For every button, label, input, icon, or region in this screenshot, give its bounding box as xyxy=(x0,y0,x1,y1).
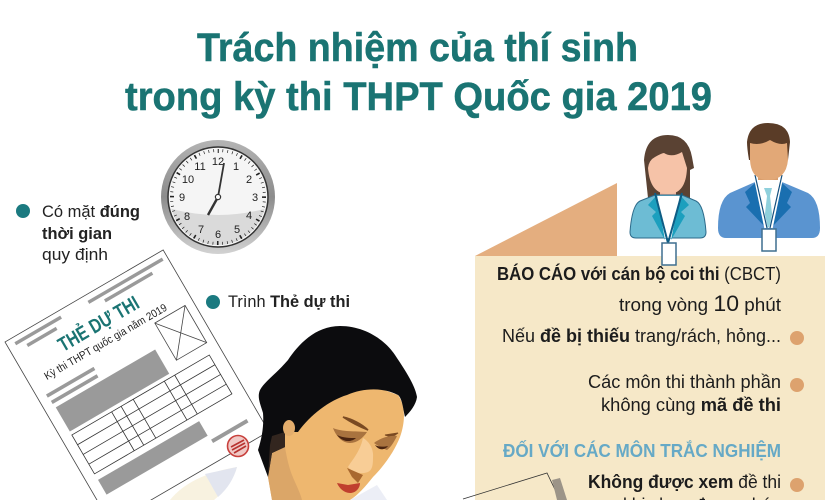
icon: male invigilator xyxy=(718,123,820,251)
item: mismatched exam code xyxy=(588,372,804,415)
icon: wall clock: 1 xyxy=(233,161,239,173)
icon: wall clock: 10 xyxy=(182,174,194,186)
icon: wall clock: 6 xyxy=(215,229,221,241)
item: mismatched exam code: không cùng mã đề thi xyxy=(601,395,781,415)
icon: wall clock: 4 xyxy=(246,210,252,222)
icon: wall clock: 2 xyxy=(246,174,252,186)
icon: wall clock xyxy=(161,140,275,254)
illustration: student head xyxy=(258,326,417,500)
icon: red stamp xyxy=(228,436,248,456)
panel: beige responsibilities xyxy=(475,256,825,500)
icon: wall clock: 7 xyxy=(198,224,204,236)
text: report to invigilator: trong vòng 10 phút xyxy=(619,291,781,316)
icon: wall clock: 11 xyxy=(194,161,206,173)
icon: female invigilator xyxy=(630,135,706,265)
icon: wall clock: 8 xyxy=(184,211,190,223)
icon: wall clock: 5 xyxy=(234,224,240,236)
bullet: present admission card: Trình Thẻ dự thi xyxy=(228,292,350,311)
photo placeholder xyxy=(155,305,207,360)
student shirt sleeve xyxy=(170,467,237,500)
title xyxy=(125,26,712,119)
admission card document xyxy=(5,250,269,500)
bullet: on time: thời gian xyxy=(42,224,112,243)
icon: wall clock: 3 xyxy=(252,192,258,204)
item: mismatched exam code: Các môn thi thành phần xyxy=(588,372,781,392)
icon: wall clock: 12 xyxy=(212,156,224,168)
peach triangle tab xyxy=(475,183,617,256)
bullet: on time: Có mặt đúng xyxy=(42,202,140,221)
score table xyxy=(72,355,232,474)
icon: wall clock: 9 xyxy=(179,192,185,204)
text: report to invigilator xyxy=(497,263,781,316)
item: do not view paper: Không được xem đề thi xyxy=(588,472,781,492)
exam paper on desk xyxy=(463,473,567,500)
text: report to invigilator: BÁO CÁO với cán bộ coi thi (CBCT) xyxy=(497,263,781,284)
title: Trách nhiệm của thí sinh xyxy=(197,26,638,70)
heading: multiple choice subjects: ĐỐI VỚI CÁC MÔN TRẮC NGHIỆM xyxy=(503,440,781,461)
card heading: THẺ DỰ THI xyxy=(54,291,143,357)
bullet: on time: quy định xyxy=(42,245,108,264)
item: damaged exam paper: Nếu đề bị thiếu trang/rách, hỏng... xyxy=(502,326,781,346)
bullet: on time xyxy=(16,202,140,264)
item: do not view paper xyxy=(588,472,804,500)
card subtitle: Kỳ thi THPT quốc gia năm 2019 xyxy=(42,302,169,383)
title: trong kỳ thi THPT Quốc gia 2019 xyxy=(125,75,712,119)
